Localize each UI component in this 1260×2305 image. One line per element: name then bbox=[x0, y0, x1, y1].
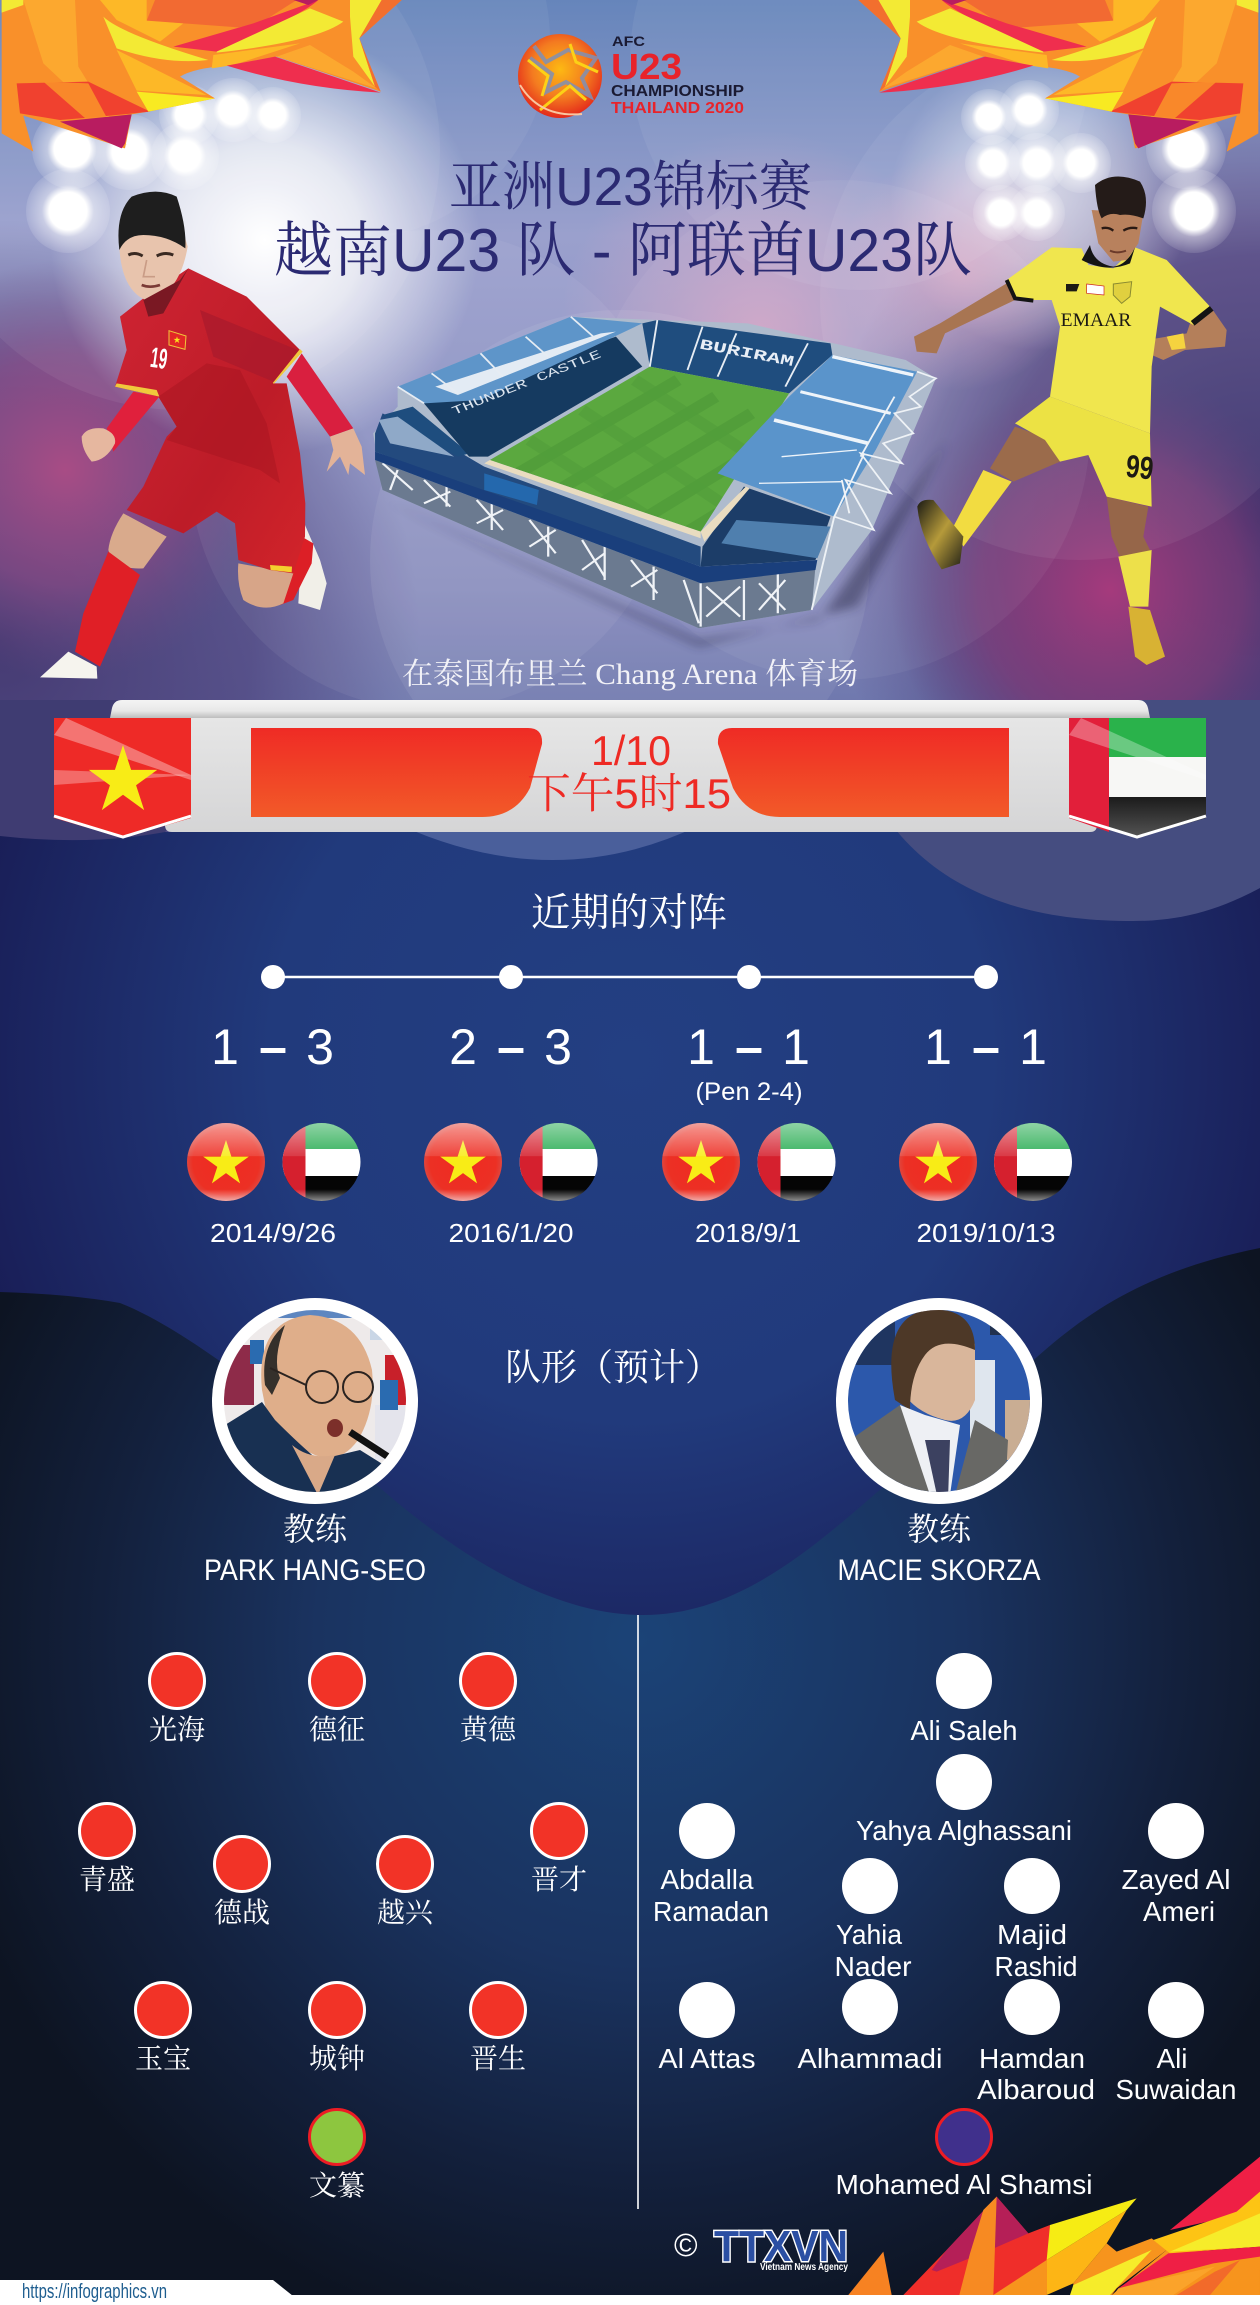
banner body bbox=[165, 718, 1097, 832]
role: 教练 bbox=[907, 1511, 973, 1547]
match 2 bbox=[424, 1019, 598, 1248]
decoration: flame bottom right bbox=[848, 2157, 1260, 2295]
player: Zayed Al Ameri bbox=[1122, 1803, 1230, 1927]
player: Abdalla Ramadan: Abdalla bbox=[660, 1864, 754, 1895]
score: 2 bbox=[449, 1019, 477, 1075]
date: 2018/9/1 bbox=[695, 1218, 801, 1248]
date: 2016/1/20 bbox=[448, 1218, 574, 1248]
player: Duc Chien bbox=[214, 1836, 270, 1928]
player: Yahia Nader: Yahia bbox=[836, 1919, 902, 1950]
player: Hoang Duc bbox=[460, 1654, 517, 1745]
player: Quang Hai: 光海 bbox=[149, 1714, 205, 1745]
player: Duc Chien: 德战 bbox=[214, 1897, 270, 1928]
arms bbox=[914, 283, 1227, 360]
player: UAE, yellow kit bbox=[914, 177, 1227, 665]
flag pennant: UAE bbox=[1069, 718, 1206, 838]
score: – bbox=[735, 1019, 763, 1075]
date: 2019/10/13 bbox=[916, 1218, 1056, 1248]
player: Tan Tai bbox=[531, 1804, 587, 1895]
score: 1 bbox=[687, 1019, 715, 1075]
player: Duc Chinh: 德征 bbox=[309, 1714, 365, 1745]
logo text: CHAMPIONSHIP bbox=[611, 83, 744, 100]
coach: Park Hang-seo bbox=[204, 1298, 426, 1587]
banner cap bbox=[110, 700, 1150, 718]
player: Ali Saleh: Ali Saleh bbox=[910, 1715, 1018, 1746]
kit sponsor and number: EMAAR bbox=[1061, 310, 1131, 331]
goalkeeper: Mohamed Al Shamsi bbox=[836, 2110, 1092, 2200]
icon: logo ball bbox=[518, 34, 602, 118]
player: Thanh Chung: 城钟 bbox=[309, 2043, 365, 2074]
score: – bbox=[259, 1019, 287, 1075]
venue caption: 在泰国布里兰 Chang Arena 体育场 bbox=[402, 658, 858, 691]
match banner bbox=[54, 700, 1206, 838]
goalkeeper: Van Toan: 文纂 bbox=[309, 2170, 365, 2201]
right leg bbox=[1107, 497, 1165, 665]
date: 2014/9/26 bbox=[210, 1218, 336, 1248]
match date and time bbox=[527, 727, 731, 817]
player: Majid Rashid: Rashid bbox=[994, 1951, 1078, 1982]
player: Viet Hung bbox=[377, 1836, 434, 1928]
player: Ali Suwaidan: Suwaidan bbox=[1116, 2074, 1236, 2105]
portrait bbox=[212, 1298, 418, 1504]
score: 1 bbox=[211, 1019, 239, 1075]
role: 教练 bbox=[283, 1511, 349, 1547]
player: Viet Hung: 越兴 bbox=[377, 1897, 434, 1928]
logo text bbox=[611, 33, 744, 117]
right red block bbox=[718, 728, 1009, 817]
left leg bbox=[917, 427, 1060, 569]
flags bbox=[424, 1123, 598, 1202]
title: 越南U23 队 - 阿联酋U23队 bbox=[274, 217, 972, 284]
player: Majid Rashid bbox=[994, 1858, 1078, 1982]
goalkeeper: Mohamed Al Shamsi: Mohamed Al Shamsi bbox=[836, 2169, 1092, 2200]
flags bbox=[187, 1123, 360, 1202]
logo text: U23 bbox=[611, 46, 682, 87]
player: Thanh Thinh bbox=[79, 1804, 135, 1895]
player: Tan Tai: 晋才 bbox=[531, 1864, 587, 1895]
player: Zayed Al Ameri: Ameri bbox=[1143, 1896, 1215, 1927]
score: 3 bbox=[544, 1019, 572, 1075]
player: Thanh Thinh: 青盛 bbox=[79, 1864, 135, 1895]
player: Alhammadi bbox=[798, 1979, 942, 2074]
logo: AFC U23 Championship Thailand 2020 bbox=[518, 33, 744, 118]
stadium illustration bbox=[373, 317, 947, 647]
match date and time: 1/10 bbox=[591, 727, 671, 774]
player: Hamdan Albaroud bbox=[977, 1979, 1095, 2105]
match date and time: 下午5时15 bbox=[527, 770, 731, 817]
left arm bbox=[82, 392, 159, 462]
score bbox=[449, 1019, 572, 1075]
agency mark: TTXVN bbox=[714, 2222, 848, 2271]
decoration: flame top left bbox=[2, 0, 402, 152]
flags bbox=[662, 1123, 836, 1202]
source url: https://infographics.vn bbox=[22, 2281, 167, 2303]
background: dark formation section bbox=[0, 1248, 1260, 2296]
copyright mark: © bbox=[674, 2227, 698, 2263]
kit sponsor and number: 99 bbox=[1124, 448, 1155, 486]
player: Majid Rashid: Majid bbox=[997, 1919, 1067, 1950]
player: Yahya Alghassani bbox=[856, 1754, 1072, 1846]
player: Thanh Chung bbox=[309, 1982, 365, 2074]
player: Vietnam, red kit bbox=[40, 192, 365, 679]
score: 3 bbox=[306, 1019, 334, 1075]
background: lower navy section bbox=[0, 700, 1260, 1632]
penalty note: (Pen 2-4) bbox=[696, 1078, 802, 1106]
score: – bbox=[497, 1019, 525, 1075]
decoration: flame top right bbox=[858, 0, 1258, 152]
score bbox=[211, 1019, 334, 1075]
kit number: 19 bbox=[148, 342, 169, 376]
background: upper stage bbox=[0, 0, 1260, 840]
player: Tan Sinh: 晋生 bbox=[470, 2043, 526, 2074]
match 1 bbox=[187, 1019, 360, 1248]
name: PARK HANG-SEO bbox=[204, 1554, 426, 1587]
player: Zayed Al Ameri: Zayed Al bbox=[1122, 1864, 1230, 1895]
agency tagline: Vietnam News Agency bbox=[760, 2262, 848, 2273]
kit flag bbox=[169, 331, 186, 349]
kit sponsor and number bbox=[1061, 282, 1155, 486]
player: Alhammadi: Alhammadi bbox=[798, 2043, 942, 2074]
jersey and shorts bbox=[115, 268, 305, 573]
score bbox=[924, 1019, 1047, 1075]
player: Quang Hai bbox=[149, 1654, 205, 1745]
legs bbox=[40, 513, 327, 679]
player: Tan Sinh bbox=[470, 1982, 526, 2074]
score: 1 bbox=[782, 1019, 810, 1075]
footer strip bbox=[0, 2280, 1260, 2305]
score: – bbox=[972, 1019, 1000, 1075]
stadium lights right bbox=[961, 80, 1236, 253]
title: 亚洲U23锦标赛 bbox=[449, 157, 812, 217]
player: Ali Saleh bbox=[910, 1653, 1018, 1746]
jersey bbox=[1007, 247, 1212, 433]
score bbox=[687, 1019, 810, 1075]
match 3 bbox=[662, 1019, 836, 1248]
lineup: UAE bbox=[653, 1653, 1236, 2200]
timeline bbox=[261, 965, 998, 989]
player: Ngoc Bao bbox=[135, 1982, 191, 2074]
player: Yahya Alghassani: Yahya Alghassani bbox=[856, 1815, 1072, 1846]
player: Abdalla Ramadan: Ramadan bbox=[653, 1896, 769, 1927]
player: Abdalla Ramadan bbox=[653, 1803, 769, 1927]
player: Hamdan Albaroud: Albaroud bbox=[977, 2074, 1095, 2105]
player: Yahia Nader bbox=[834, 1858, 912, 1982]
stadium lights left bbox=[26, 78, 301, 253]
match 4 bbox=[899, 1019, 1072, 1248]
player: Hoang Duc: 黄德 bbox=[460, 1714, 517, 1745]
head bbox=[1082, 177, 1146, 268]
left red block bbox=[251, 728, 542, 817]
shorts bbox=[1015, 397, 1152, 507]
head bbox=[118, 192, 188, 317]
flag pennant: Vietnam bbox=[54, 718, 191, 838]
player: Al Attas bbox=[658, 1982, 756, 2074]
score: 1 bbox=[1019, 1019, 1047, 1075]
player: Ali Suwaidan: Ali bbox=[1156, 2043, 1188, 2074]
lineup: Vietnam bbox=[79, 1654, 587, 2201]
flags bbox=[899, 1123, 1072, 1202]
portrait bbox=[836, 1298, 1042, 1504]
player: Duc Chinh bbox=[309, 1654, 365, 1745]
section heading: expected lineup: 队形（预计） bbox=[505, 1347, 721, 1388]
name: MACIE SKORZA bbox=[838, 1554, 1040, 1587]
stadium illustration: BURIRAM bbox=[698, 336, 796, 371]
player: Yahia Nader: Nader bbox=[834, 1951, 912, 1982]
player: Al Attas: Al Attas bbox=[658, 2043, 756, 2074]
right arm bbox=[287, 353, 365, 475]
stadium illustration: THUNDER CASTLE bbox=[449, 347, 604, 418]
player: Ali Suwaidan bbox=[1116, 1982, 1236, 2105]
player: Ngoc Bao: 玉宝 bbox=[135, 2043, 191, 2074]
logo text: AFC bbox=[612, 33, 645, 49]
score: 1 bbox=[924, 1019, 952, 1075]
coach: Macie Skorza bbox=[836, 1298, 1042, 1587]
player: Hamdan Albaroud: Hamdan bbox=[979, 2043, 1085, 2074]
section heading: recent matches: 近期的对阵 bbox=[531, 892, 727, 935]
goalkeeper: Van Toan bbox=[309, 2110, 365, 2201]
title bbox=[274, 157, 972, 284]
logo text: THAILAND 2020 bbox=[611, 100, 744, 117]
credit: TTXVN logo bbox=[674, 2222, 848, 2273]
